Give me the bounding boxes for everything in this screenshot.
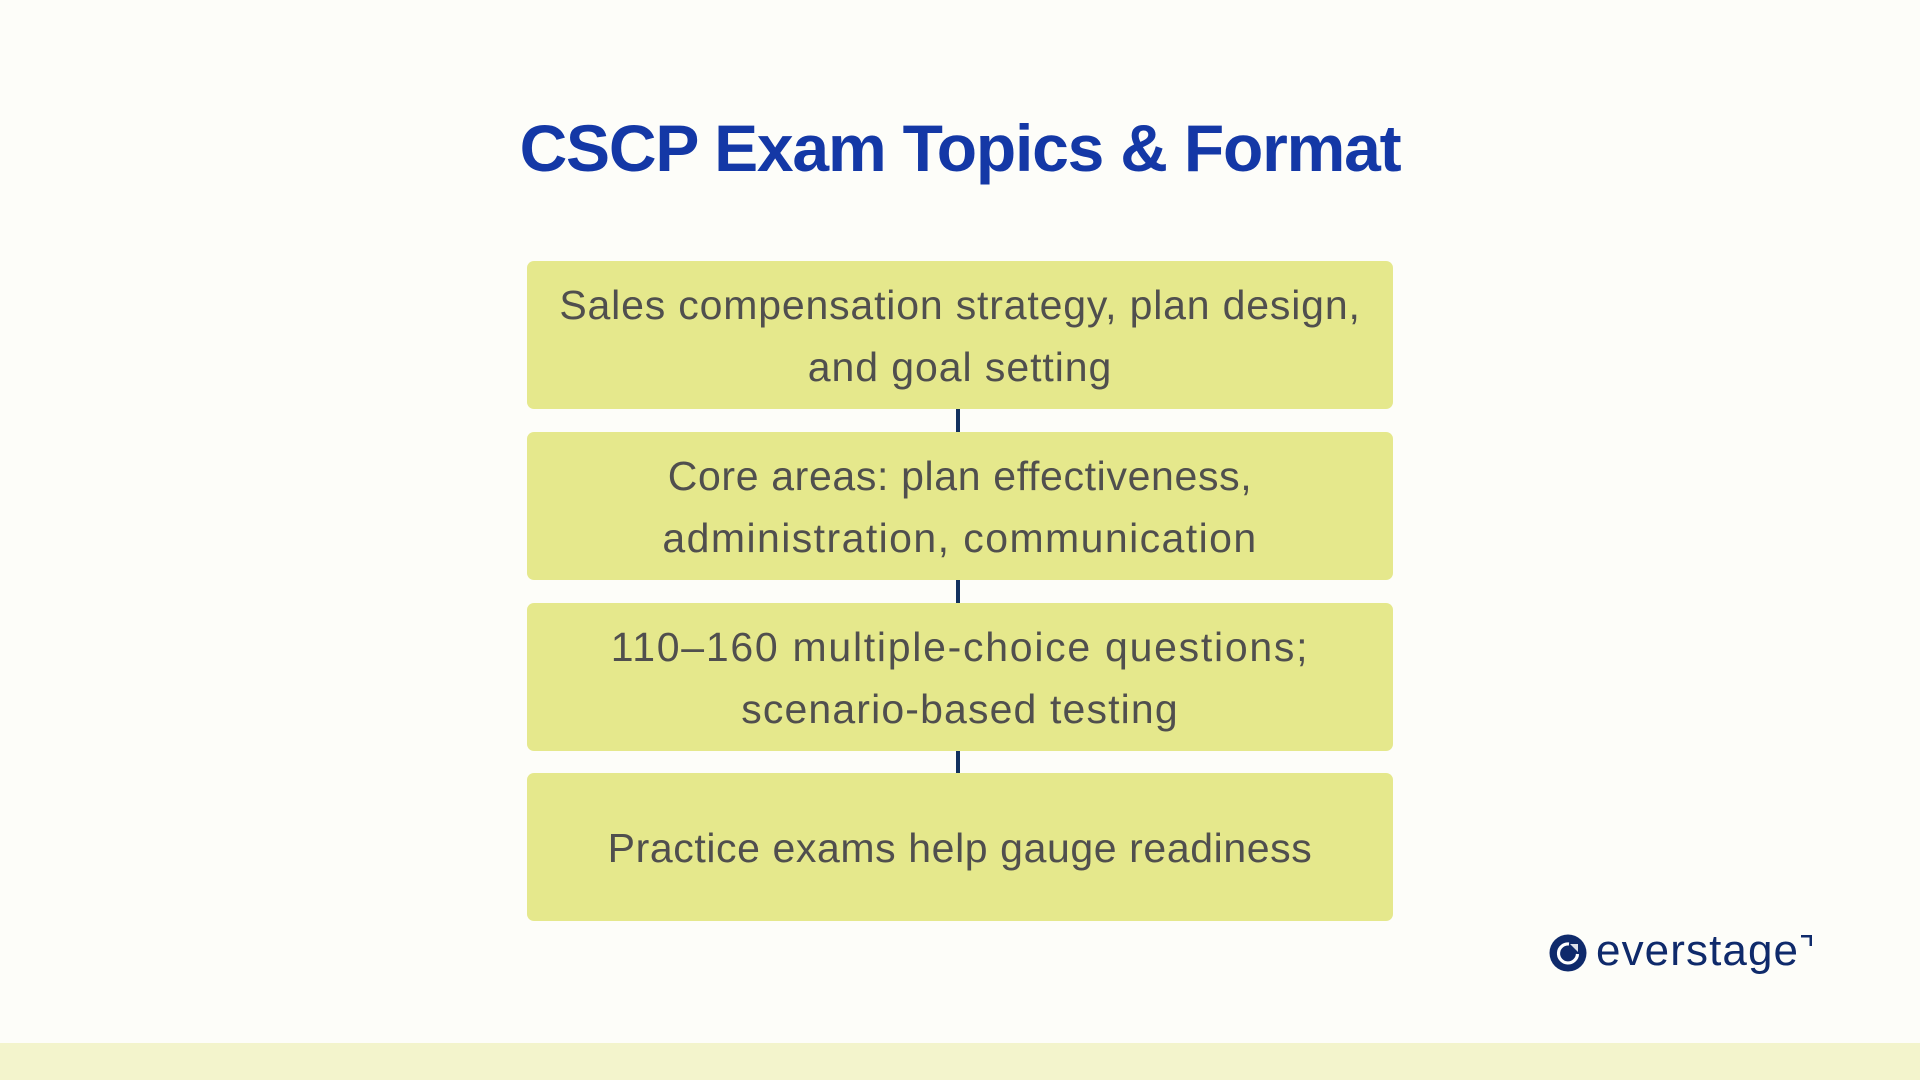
footer band — [0, 1043, 1920, 1080]
box: question format — [527, 603, 1393, 751]
connector: step 3 to step 4 — [956, 751, 960, 774]
box: practice exams — [527, 773, 1393, 921]
box: strategy and plan design: and goal setting — [808, 344, 1112, 390]
box: question format: scenario-based testing — [741, 686, 1179, 732]
connector: step 2 to step 3 — [956, 580, 960, 604]
icon: everstage mark — [1550, 934, 1586, 972]
box: strategy and plan design — [527, 261, 1393, 409]
logo: everstage — [1550, 926, 1812, 975]
box: practice exams: Practice exams help gauge readiness — [608, 825, 1312, 871]
wordmark: everstage — [1596, 926, 1799, 975]
box: question format: 110–160 multiple-choice questions; — [611, 624, 1309, 670]
box: core areas: Core areas: plan effectiveness, — [668, 453, 1252, 499]
box: core areas — [527, 432, 1393, 580]
box: core areas: administration, communication — [662, 515, 1258, 561]
icon: wordmark corner tick — [1801, 935, 1812, 946]
title: CSCP Exam Topics & Format — [520, 111, 1400, 185]
connector: step 1 to step 2 — [956, 409, 960, 433]
box: strategy and plan design: Sales compensation strategy, plan design, — [559, 282, 1361, 328]
